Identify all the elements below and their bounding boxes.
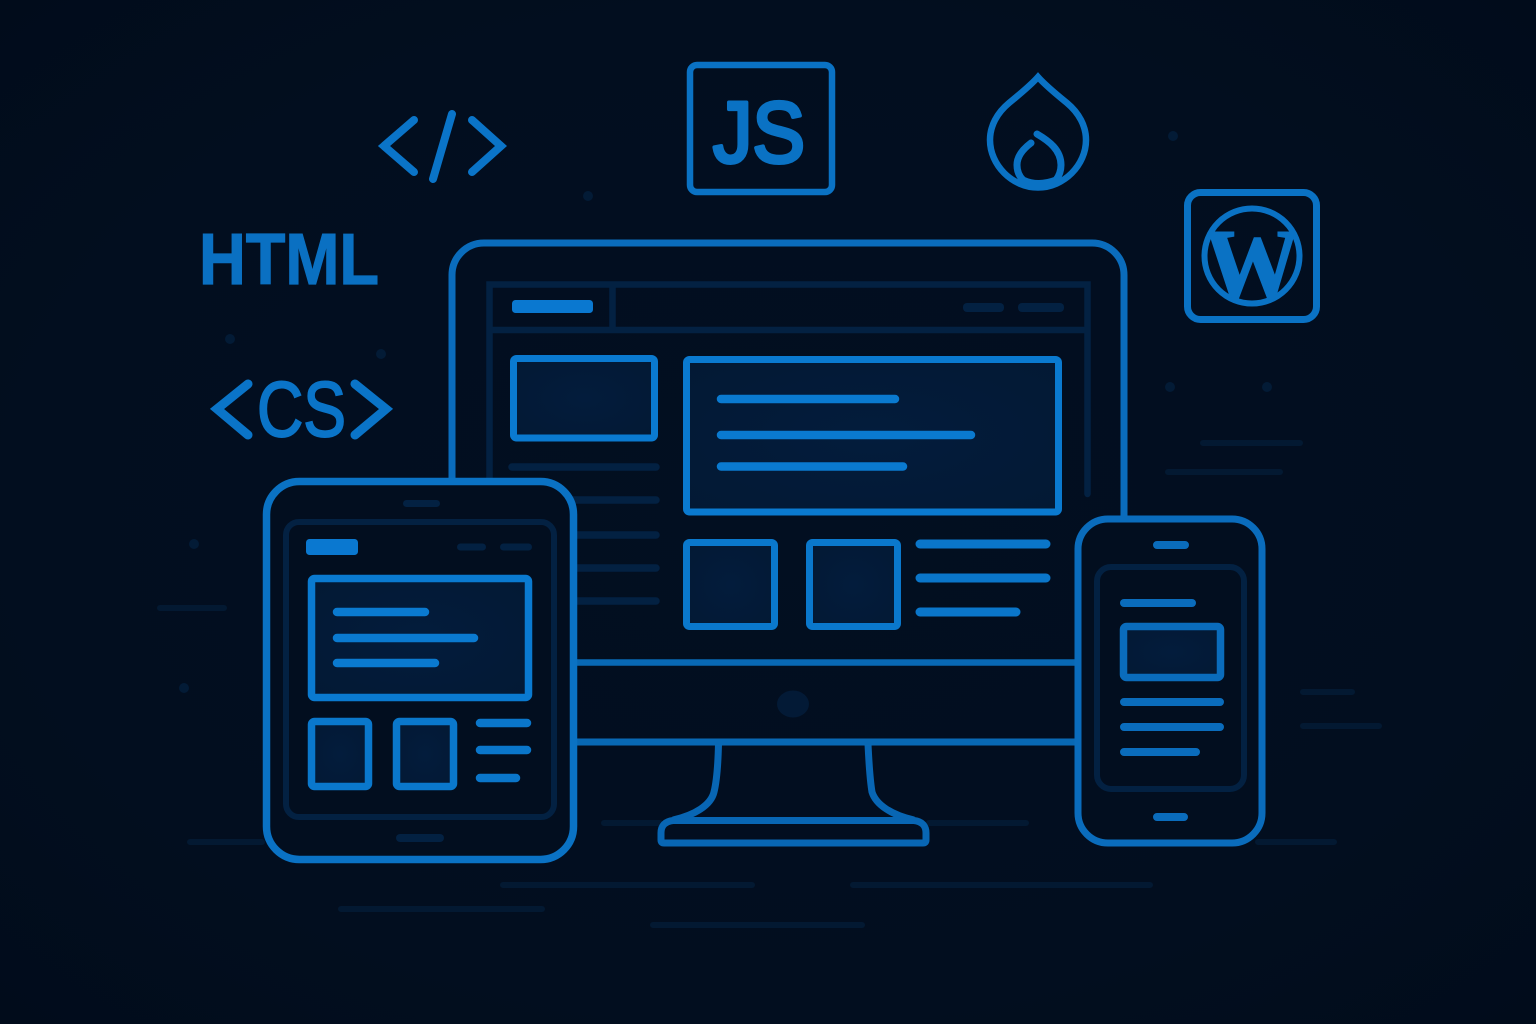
tablet logo bar (306, 539, 358, 555)
monitor thumbnail cards (686, 542, 898, 626)
tablet body (266, 482, 574, 860)
monitor sidebar lines (512, 467, 656, 601)
tablet nav items (457, 544, 532, 550)
tablet screen frame (286, 522, 554, 817)
monitor button (777, 690, 809, 718)
monitor (452, 243, 1124, 843)
tablet hero panel (312, 578, 528, 698)
monitor chin (452, 662, 1124, 742)
tablet (266, 482, 574, 860)
phone text lines (1124, 702, 1220, 752)
illustration: responsive devices and web technologies (157, 62, 1382, 928)
phone body (1078, 519, 1262, 843)
phone image card (1124, 626, 1220, 678)
tablet thumbnail cards (312, 722, 454, 786)
monitor sidebar card (514, 358, 654, 438)
monitor casing (452, 243, 1124, 742)
tablet text lines (480, 723, 527, 778)
icon: WordPress badge (1188, 192, 1316, 322)
phone heading line (1124, 599, 1192, 607)
phone screen frame (1097, 567, 1244, 789)
icon: JS badge: JS (713, 85, 805, 181)
phone (1078, 519, 1262, 843)
icon: JS badge (690, 65, 832, 192)
monitor text lines (920, 544, 1046, 612)
monitor screen frame (490, 284, 1088, 560)
tablet speakers (396, 500, 444, 842)
monitor logo bar (512, 300, 593, 313)
icon: Drupal drop (990, 77, 1086, 188)
icon: CSS code tag: CS (257, 365, 346, 453)
monitor stand (661, 744, 926, 843)
background decoration: faint lines and dots (160, 131, 1379, 925)
monitor nav items (963, 303, 1064, 312)
icon: WordPress badge: W (1204, 209, 1300, 322)
monitor hero panel (686, 360, 1058, 512)
icon: closing code tag (384, 114, 501, 179)
phone speakers (1157, 545, 1185, 817)
icon: CSS code tag (217, 365, 386, 453)
icon: HTML wordmark: HTML (199, 220, 379, 300)
